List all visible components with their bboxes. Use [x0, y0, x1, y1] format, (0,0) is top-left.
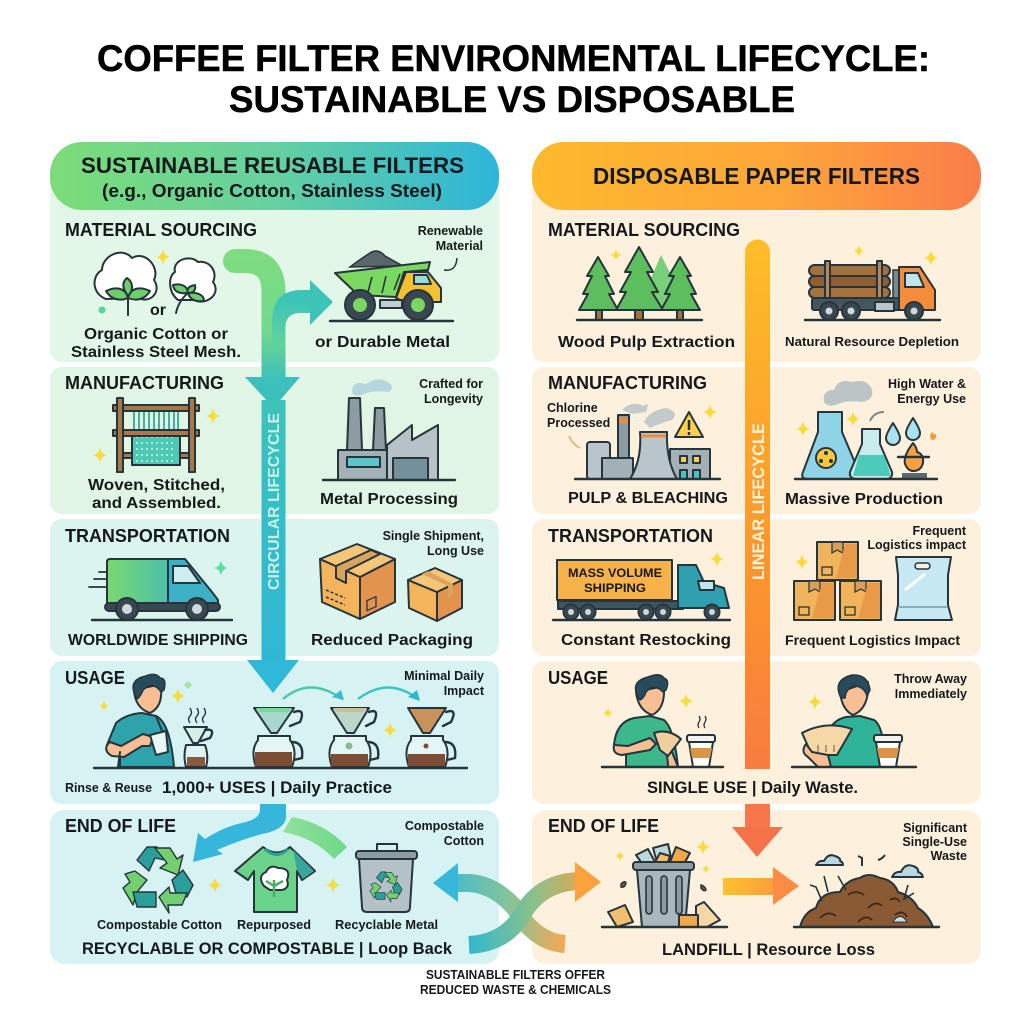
arrows: reuse cycle [283, 688, 420, 701]
note: frequent logistics impact: Frequent [913, 524, 967, 538]
section labels disposable: MANUFACTURING [548, 373, 707, 393]
text: woven stitched assembled: and Assembled. [92, 495, 221, 512]
panel: usage disposable [532, 661, 981, 804]
text: worldwide shipping: WORLDWIDE SHIPPING [68, 632, 248, 649]
note: chlorine processed: Chlorine [547, 401, 598, 415]
note: minimal daily impact: Impact [444, 684, 485, 698]
header: reusable filters: SUSTAINABLE REUSABLE FILTERS [81, 153, 464, 178]
note: frequent logistics impact [867, 524, 967, 552]
panel: usage reusable [50, 661, 499, 804]
icon: cotton plants [95, 249, 216, 319]
header: disposable filters [532, 142, 981, 210]
arrow: blue return strand [433, 863, 565, 944]
icon: stacked boxes and plastic bag [794, 542, 952, 620]
icon: pulp and bleaching plant [569, 404, 720, 479]
note: significant single-use waste: Significant [903, 821, 968, 835]
arrow: branch to durable metal [272, 280, 333, 345]
text: wood pulp extraction: Wood Pulp Extraction [558, 334, 735, 351]
note: minimal daily impact: Minimal Daily [404, 669, 484, 683]
arrow: circular lifecycle [235, 261, 300, 693]
text: natural resource depletion: Natural Resource Depletion [785, 334, 959, 349]
header: reusable filters [50, 142, 499, 210]
arrow: bin to landfill [723, 867, 799, 905]
sparkles: end of life [208, 877, 340, 893]
title [97, 38, 930, 120]
note: high water and energy use: High Water & [888, 377, 966, 391]
section labels disposable: END OF LIFE [548, 816, 659, 836]
text: organic cotton or steel mesh: Organic Cotton or [84, 326, 228, 343]
note: renewable material [418, 224, 483, 253]
section labels disposable: MATERIAL SOURCING [548, 220, 740, 240]
note: chlorine processed [547, 401, 610, 430]
text: organic cotton or steel mesh [71, 326, 241, 361]
text: landfill resource loss: LANDFILL | Resource Loss [662, 940, 875, 959]
section labels reusable [65, 220, 257, 836]
arrow: linear lifecycle [732, 240, 783, 857]
note: compostable cotton: Cotton [444, 834, 484, 848]
icon: mass shipping truck: MASS VOLUME [568, 566, 662, 580]
icon: three reusable drippers [253, 708, 455, 767]
note: single shipment long use [383, 529, 484, 558]
text: bottom takeaway: REDUCED WASTE & CHEMICALS [420, 983, 611, 997]
text: frequent logistics impact: Frequent Logistics Impact [785, 632, 960, 648]
text: end of life captions: Recyclable Metal [335, 918, 438, 932]
panel: transportation reusable [50, 519, 499, 656]
icon: recycling symbol [123, 847, 193, 913]
note: significant single-use waste: Waste [931, 849, 967, 863]
icon: mass shipping truck: SHIPPING [584, 581, 646, 595]
icon: delivery van [89, 559, 232, 620]
note: minimal daily impact [404, 669, 485, 698]
section labels reusable: MATERIAL SOURCING [65, 220, 257, 240]
icon: dump truck [330, 251, 457, 321]
note: renewable material: Material [436, 239, 483, 253]
header: disposable filters: DISPOSABLE PAPER FILTERS [593, 163, 920, 189]
text: recyclable or compostable: RECYCLABLE OR COMPOSTABLE | Loop Back [82, 939, 453, 958]
arrow: circular lifecycle: CIRCULAR LIFECYCLE [266, 413, 283, 590]
text: massive production: Massive Production [785, 491, 943, 508]
panel: material sourcing reusable [50, 170, 499, 362]
icon: cotton plants: or [150, 302, 166, 319]
note: single shipment long use: Single Shipment, [383, 529, 484, 543]
header: reusable filters: (e.g., Organic Cotton, Stainless Steel) [102, 181, 442, 201]
text: uses and daily practice: 1,000+ USES | Daily Practice [162, 778, 392, 797]
panel: manufacturing disposable [532, 367, 981, 514]
text: woven stitched assembled: Woven, Stitched, [88, 477, 225, 494]
icon: repurposed t-shirt [235, 847, 315, 912]
icon: landfill mound [794, 855, 939, 927]
panel: end of life reusable [50, 810, 499, 964]
section labels disposable: USAGE [548, 668, 608, 688]
section labels reusable: USAGE [65, 668, 125, 688]
text: bottom takeaway [420, 968, 611, 997]
text: rinse and reuse: Rinse & Reuse [65, 781, 152, 795]
note: crafted for longevity [419, 377, 483, 406]
text: pulp and bleaching: PULP & BLEACHING [568, 490, 728, 507]
note: crafted for longevity: Crafted for [419, 377, 483, 391]
panel: end of life disposable [532, 810, 981, 964]
icon: recycling bin [356, 844, 417, 912]
section labels reusable: MANUFACTURING [65, 373, 224, 393]
icon: flasks drops and flame [795, 381, 937, 479]
text: reduced packaging: Reduced Packaging [311, 632, 473, 649]
arrow: linear lifecycle: LINEAR LIFECYCLE [749, 423, 768, 580]
panel: manufacturing reusable [50, 367, 499, 514]
icon: loom [93, 398, 220, 472]
section labels disposable: TRANSPORTATION [548, 526, 713, 546]
icon: person throwing away filter [792, 675, 916, 767]
title: COFFEE FILTER ENVIRONMENTAL LIFECYCLE: [97, 38, 930, 79]
note: significant single-use waste: Single-Use [902, 835, 967, 849]
text: end of life captions: Repurposed [237, 918, 311, 932]
note: high water and energy use [888, 377, 966, 406]
text: woven stitched assembled [88, 477, 225, 512]
icon: log truck [805, 245, 940, 320]
icon: person pouring with coffee [94, 674, 467, 768]
text: single use daily waste: SINGLE USE | Daily Waste. [647, 778, 858, 797]
section labels reusable: TRANSPORTATION [65, 526, 230, 546]
note: chlorine processed: Processed [547, 416, 610, 430]
section labels reusable: END OF LIFE [65, 816, 176, 836]
note: throw away immediately [894, 672, 967, 701]
note: compostable cotton: Compostable [405, 819, 484, 833]
text: or durable metal: or Durable Metal [315, 334, 450, 351]
icon: reduced packaging boxes [320, 537, 462, 621]
text: organic cotton or steel mesh: Stainless Steel Mesh. [71, 344, 241, 361]
section labels disposable [548, 220, 740, 836]
icon: metal factory [323, 379, 455, 480]
icon: mass shipping truck [553, 551, 730, 620]
note: single shipment long use: Long Use [427, 544, 484, 558]
panel: transportation disposable [532, 519, 981, 656]
arrow: teal to orange strand [469, 862, 601, 945]
note: significant single-use waste [902, 821, 968, 863]
note: compostable cotton [405, 819, 484, 848]
note: renewable material: Renewable [418, 224, 483, 238]
note: high water and energy use: Energy Use [897, 392, 966, 406]
note: throw away immediately: Throw Away [894, 672, 967, 686]
text: metal processing: Metal Processing [320, 491, 458, 508]
note: throw away immediately: Immediately [895, 687, 967, 701]
text: end of life captions [97, 918, 438, 932]
icon: pine trees [577, 247, 702, 320]
icon: person with paper filter and cup [602, 675, 723, 767]
title: SUSTAINABLE VS DISPOSABLE [229, 79, 795, 120]
panel: material sourcing disposable [532, 170, 981, 362]
icon: trash bin overflowing [602, 839, 727, 927]
text: end of life captions: Compostable Cotton [97, 918, 222, 932]
arrow: end of life curve [193, 804, 286, 862]
arrow: green return arc [283, 817, 347, 859]
note: crafted for longevity: Longevity [424, 392, 483, 406]
note: frequent logistics impact: Logistics impact [867, 538, 967, 552]
text: constant restocking: Constant Restocking [561, 632, 731, 649]
text: bottom takeaway: SUSTAINABLE FILTERS OFFER [426, 968, 605, 982]
